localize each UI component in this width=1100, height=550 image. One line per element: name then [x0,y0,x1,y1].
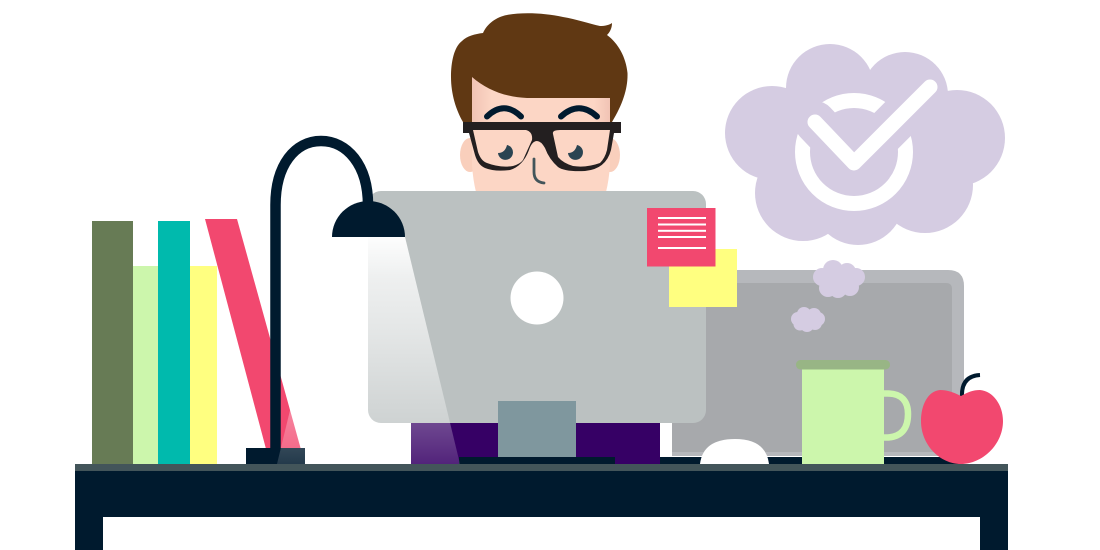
apple: stem [962,375,980,397]
person: developer head [451,13,628,192]
hair [451,13,628,122]
check mark [815,87,930,163]
desk [75,464,1008,550]
lamp: shade [332,201,405,237]
small thought cloud: small [791,307,825,332]
laptop: base strip [660,457,960,464]
small thought cloud: medium [813,260,865,298]
thought bubble: large cloud with check [725,44,1005,245]
monitor base [459,457,615,464]
book: leaning pink [205,219,305,464]
ear: left [460,138,480,172]
desk: right leg [980,517,1008,550]
laptop: outer shell [672,270,964,456]
sticky note: pink [647,208,716,266]
person: purple torso [411,423,660,464]
monitor: body [368,191,706,423]
mouse [700,439,769,464]
monitor: stand [498,401,576,457]
book: olive [92,221,133,464]
check ring [802,100,906,204]
books [92,219,305,464]
coffee mug [796,360,908,464]
monitor: logo [510,272,564,324]
ear: right [600,138,620,172]
eye: right [568,145,583,160]
nose [534,159,544,183]
mug: rim [796,360,890,370]
lamp: arm [276,141,368,460]
mug: handle [884,394,908,438]
desk: top edge [75,464,1008,471]
lamp light cone [277,237,460,464]
desk: body [75,471,1008,517]
book: yellow [190,266,217,464]
face shade: left [472,74,492,122]
laptop: screen [672,283,952,452]
eyebrow: right [561,108,597,116]
lamp: base [246,448,305,464]
apple: body [921,390,1003,464]
mug: body [802,369,884,464]
sticky note: yellow [669,249,737,307]
cloud shape [725,44,1005,245]
face shade: right [594,96,610,122]
glasses [463,122,621,171]
check halo [798,102,911,149]
face [472,70,610,192]
desk lamp [246,141,405,464]
book: light green [133,266,158,464]
eyebrow: left [487,108,521,116]
eye: left [498,145,513,160]
monitor [368,191,706,457]
apple [921,375,1003,464]
back laptop [660,270,964,464]
desk: left leg [75,517,103,550]
book: teal [158,221,190,464]
